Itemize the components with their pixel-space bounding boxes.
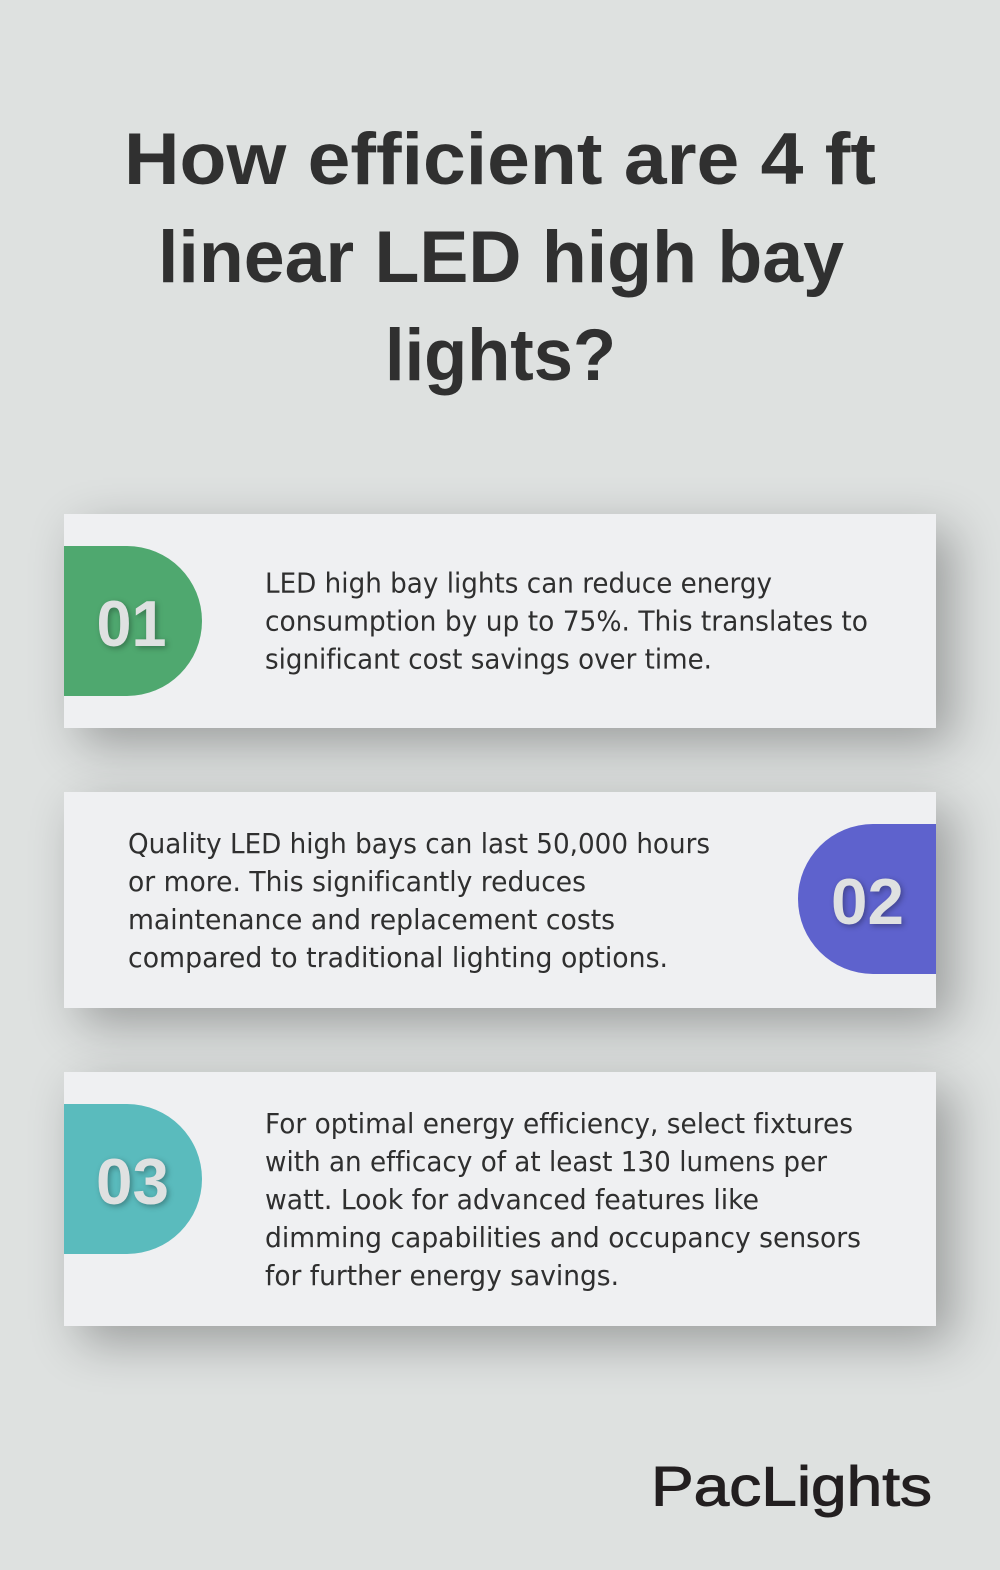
text: energy savings: LED high bay lights can reduce energy — [265, 568, 772, 600]
badge: 01 — [64, 546, 202, 696]
badge: 02: 02 — [831, 865, 904, 938]
text: energy savings — [265, 568, 868, 676]
text: efficacy: watt. Look for advanced features like — [265, 1184, 759, 1216]
badge: 03 — [64, 1104, 202, 1254]
panel: card 01 — [64, 514, 936, 728]
text: efficacy: with an efficacy of at least 130 lumens per — [265, 1146, 828, 1178]
text: energy savings: significant cost savings over time. — [265, 644, 712, 676]
title — [124, 119, 876, 396]
logo: PacLights: PacLights — [651, 1454, 932, 1518]
text: efficacy — [265, 1108, 861, 1292]
text: efficacy: For optimal energy efficiency, select fixtures — [265, 1108, 853, 1140]
panel: card 02 — [64, 792, 936, 1008]
text: lifespan: compared to traditional lighting options. — [128, 942, 668, 974]
badge: 01: 01 — [96, 587, 166, 660]
text: lifespan — [128, 828, 710, 974]
panel: card 03 — [64, 1072, 936, 1326]
title: lights? — [385, 315, 616, 396]
title: How efficient are 4 ft — [124, 119, 876, 200]
badge: 03: 03 — [96, 1145, 169, 1218]
text: lifespan: maintenance and replacement costs — [128, 904, 615, 936]
text: efficacy: dimming capabilities and occupancy sensors — [265, 1222, 861, 1254]
text: energy savings: consumption by up to 75%. This translates to — [265, 606, 868, 638]
title: linear LED high bay — [158, 217, 844, 298]
text: lifespan: or more. This significantly reduces — [128, 866, 586, 898]
text: efficacy: for further energy savings. — [265, 1260, 619, 1292]
badge: 02 — [798, 824, 936, 974]
text: lifespan: Quality LED high bays can last 50,000 hours — [128, 828, 710, 860]
